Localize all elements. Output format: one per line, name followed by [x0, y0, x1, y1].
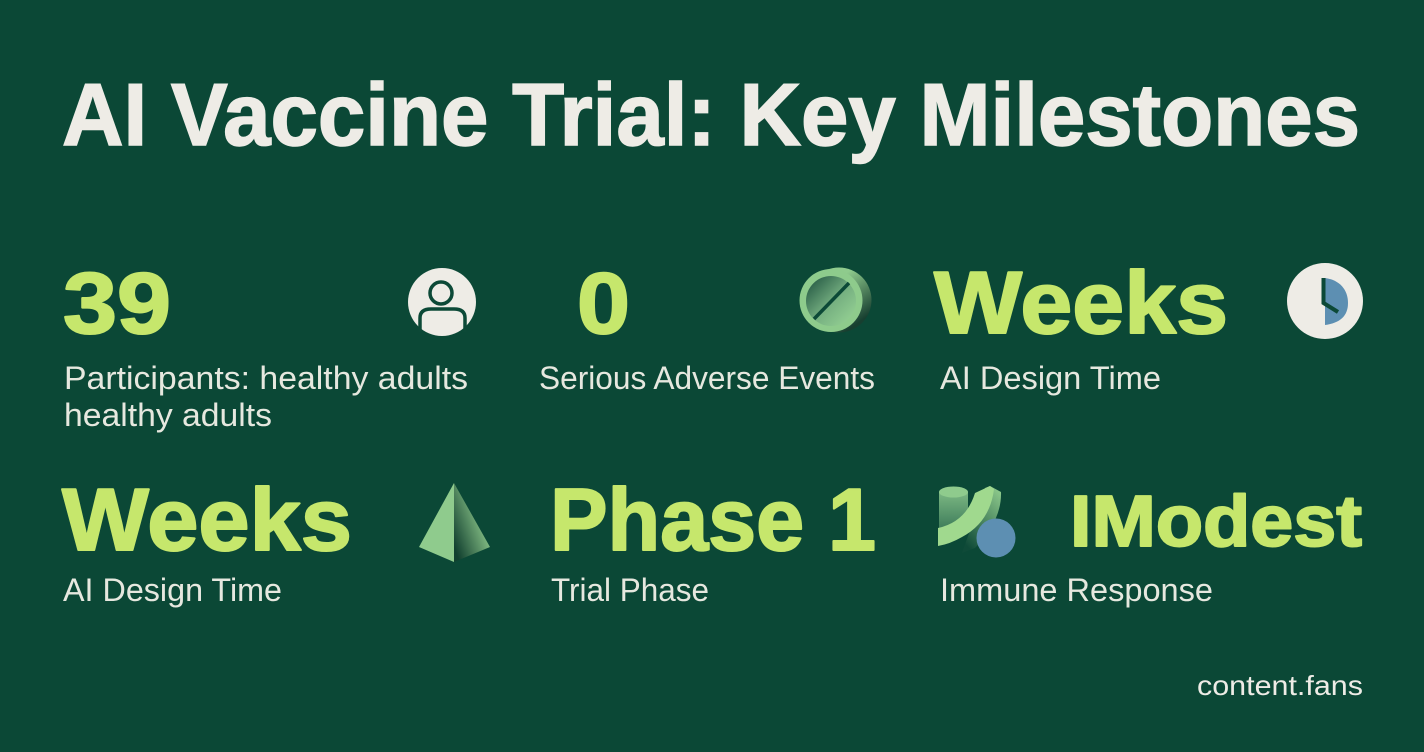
icon: crossed pill	[800, 268, 872, 332]
label: healthy adults: healthy adults	[64, 397, 272, 433]
icon: person	[408, 268, 476, 336]
value: 39: 39	[63, 256, 171, 352]
title: AI Vaccine Trial: Key Milestones	[62, 65, 1360, 164]
stat: immune response	[938, 482, 1362, 608]
label: AI design time: AI Design Time	[940, 360, 1161, 396]
stat: AI design time, bottom	[62, 470, 490, 608]
label: trial phase: Trial Phase	[551, 572, 709, 608]
value: Phase 1: Phase 1	[550, 470, 876, 569]
value: Weeks: Weeks	[934, 253, 1228, 352]
value: 0: 0	[577, 256, 630, 352]
label: immune response: Immune Response	[940, 572, 1213, 608]
stat: serious adverse events	[539, 256, 875, 396]
label: AI design time: AI Design Time	[63, 572, 282, 608]
label: serious adverse events: Serious Adverse Events	[539, 360, 875, 396]
value: Weeks: Weeks	[62, 470, 352, 569]
stat: trial phase	[550, 470, 876, 608]
credit: content.fans: content.fans	[1197, 670, 1363, 701]
value: IModest: IModest	[1070, 482, 1362, 562]
label: participants: Participants: healthy adults	[64, 360, 468, 396]
icon: pyramid	[419, 483, 490, 562]
icon: abstract shapes	[938, 486, 1016, 558]
stat: participants	[63, 256, 476, 433]
icon: clock	[1287, 263, 1363, 339]
stat: AI design time, top	[934, 253, 1363, 396]
